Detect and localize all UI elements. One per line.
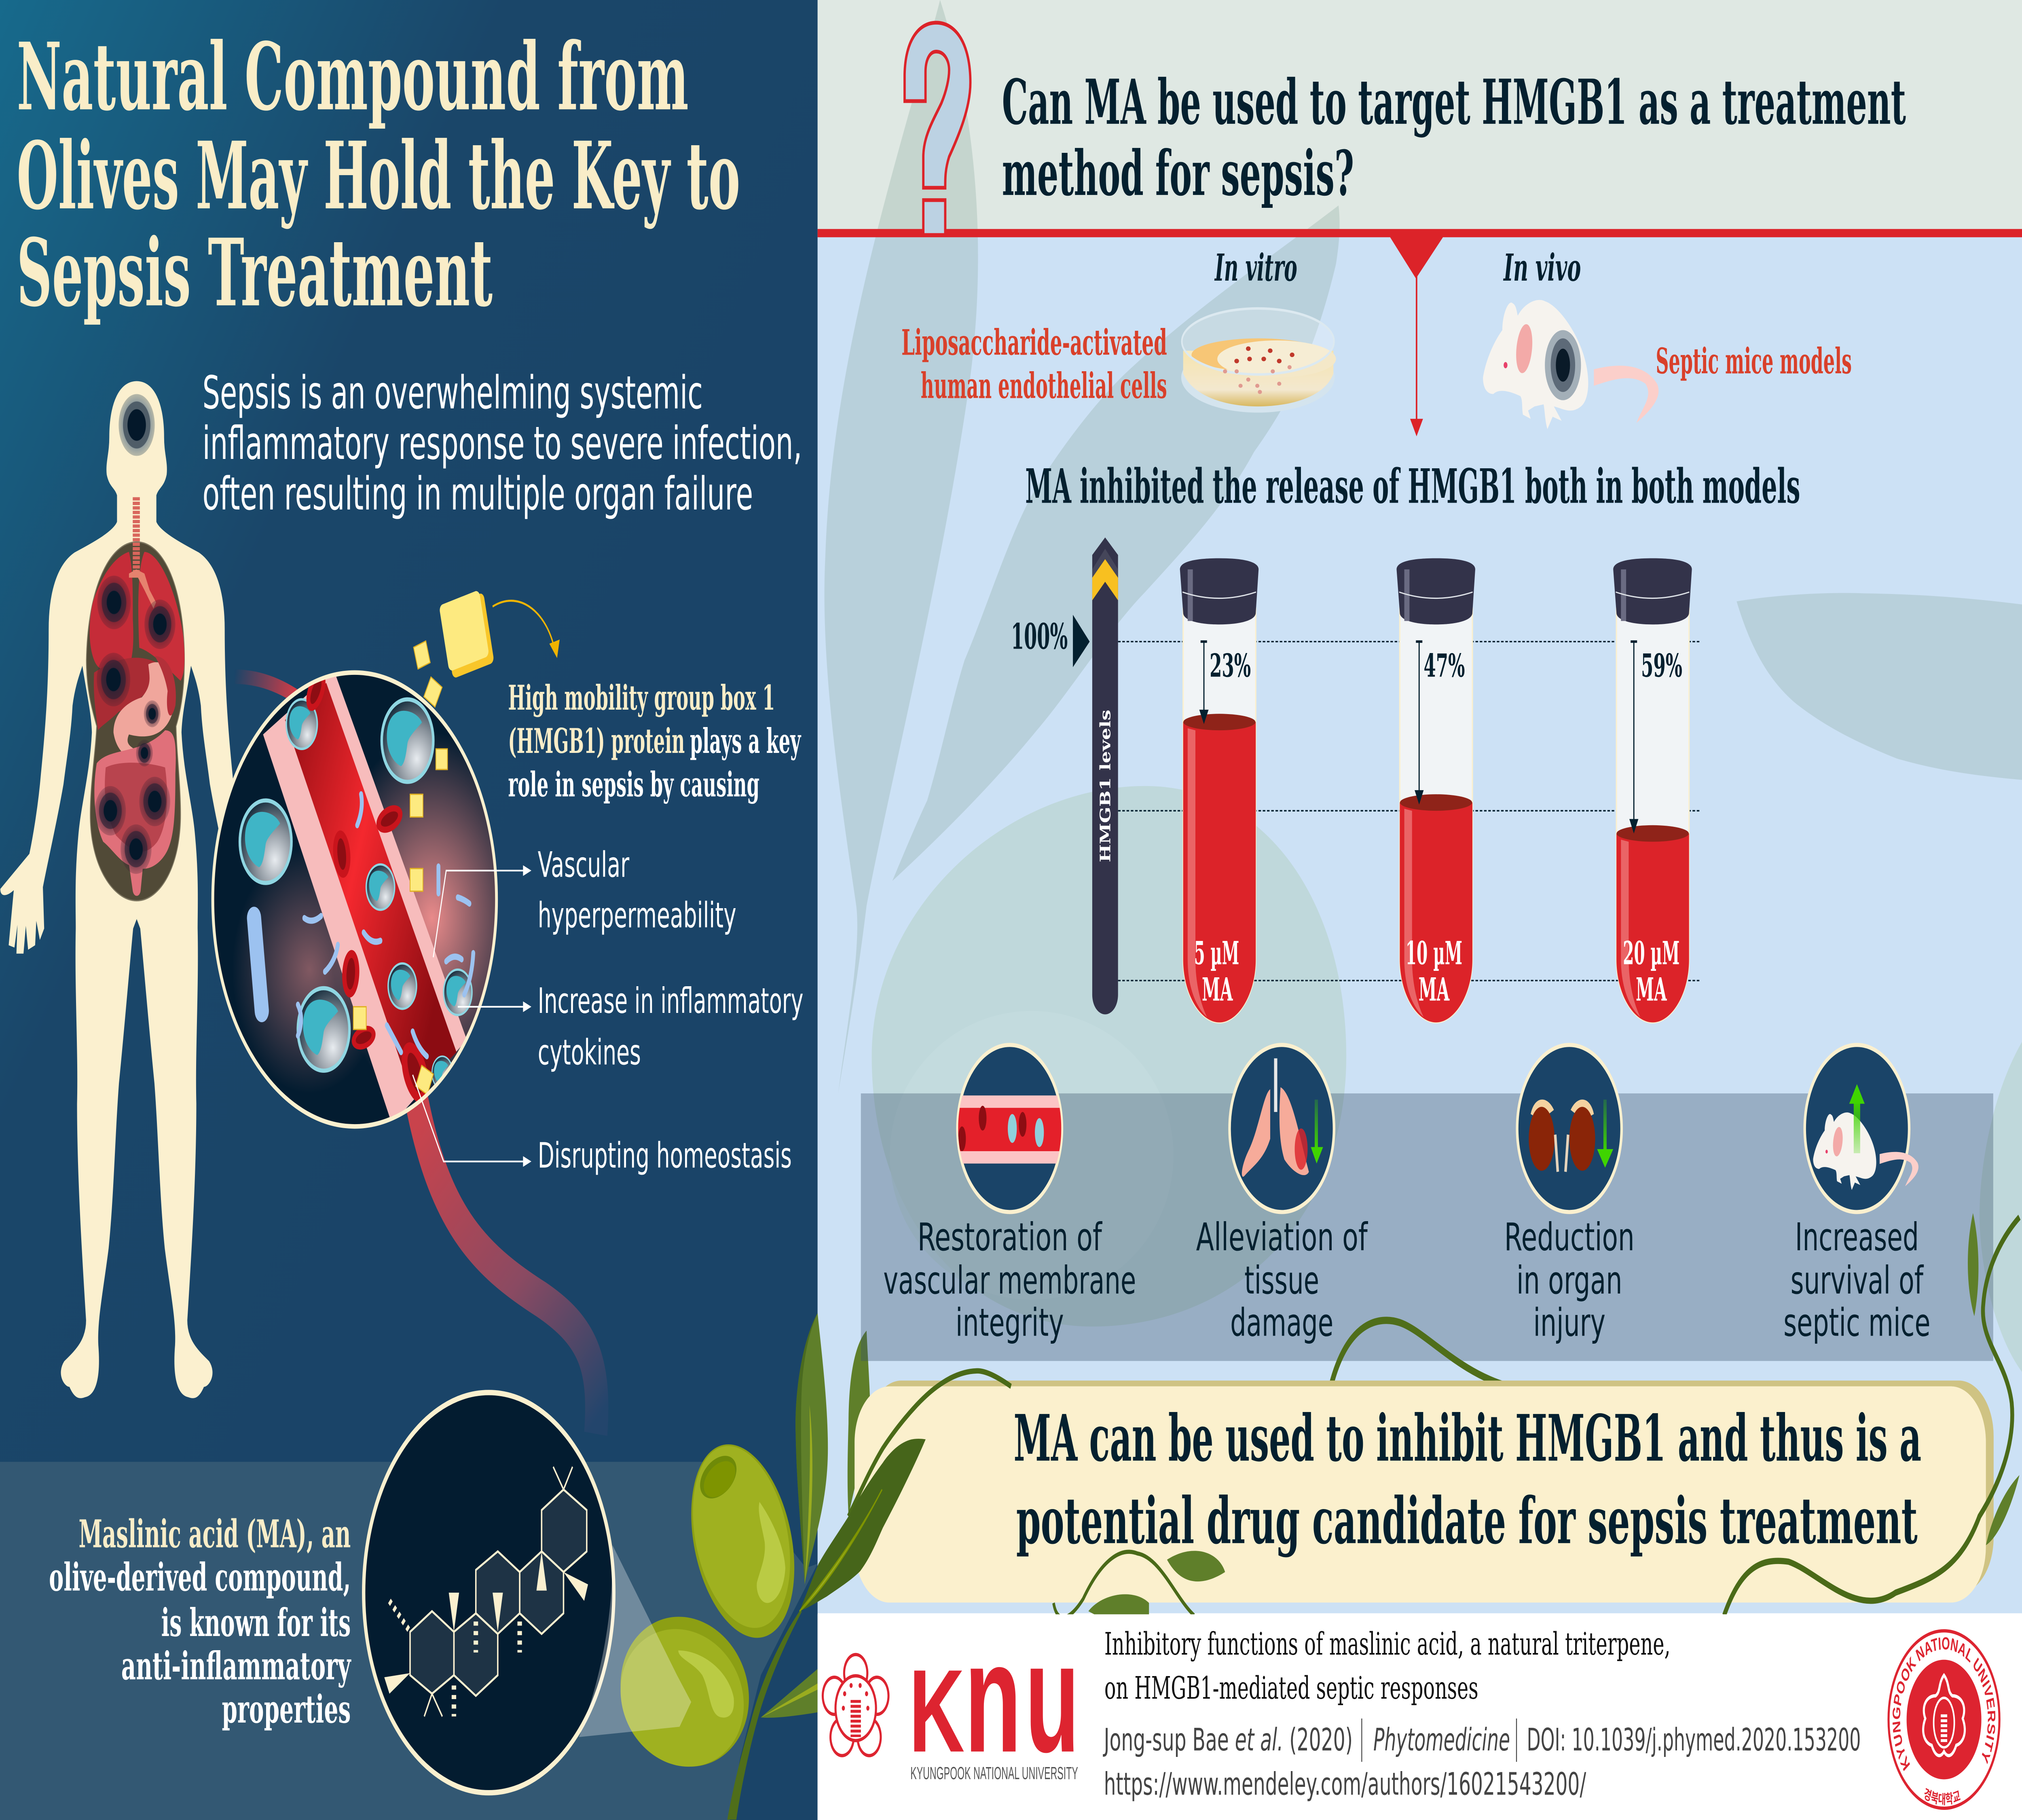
- outcome: organ injury: in organ: [1516, 1258, 1622, 1303]
- outcome: organ injury: Reduction: [1504, 1215, 1635, 1260]
- icon: blue cytokine bacteria: [254, 794, 473, 1056]
- in vitro label: In vitro: [1214, 246, 1297, 290]
- icon: kidneys: [1517, 1045, 1622, 1212]
- outcome: tissue damage: damage: [1230, 1300, 1333, 1345]
- outcome: organ injury: [1504, 1215, 1635, 1345]
- outcome: survival: survival of: [1791, 1258, 1924, 1303]
- conclusion banner: [854, 1380, 1994, 1602]
- effects list: cytokines: [538, 1032, 641, 1073]
- HMGB1 description text: High mobility group box 1: [508, 678, 775, 718]
- icon: olive bottom: [614, 1604, 755, 1780]
- test tube: 5 uM: 23%: [1210, 647, 1251, 685]
- maslinic acid text: Maslinic acid (MA), an: [79, 1511, 351, 1556]
- effects list: Vascular: [538, 845, 629, 886]
- citation text: https://www.mendeley.com/authors/16021543200/: [1104, 1767, 1586, 1803]
- human body with organs: [1, 382, 273, 1398]
- maslinic acid text: anti-inflammatory: [121, 1643, 351, 1689]
- icon: immune cells: [240, 700, 472, 1089]
- intro text: inflammatory response to severe infection,: [203, 417, 802, 470]
- test tube: 5 uM: [1180, 558, 1258, 1023]
- red divider line: [818, 229, 2022, 237]
- blood vessel tail: [235, 676, 597, 1434]
- outcome: survival: Increased: [1795, 1215, 1919, 1260]
- test tube: 20 uM: 59%: [1641, 647, 1682, 685]
- citation text: Inhibitory functions of maslinic acid, a natural triterpene,: [1104, 1626, 1671, 1662]
- test tube: 20 uM: 20 µM: [1623, 934, 1679, 972]
- 100 percent marker: 100%: [1011, 616, 1068, 657]
- panel: left background: [0, 0, 818, 1820]
- effects list: [538, 845, 804, 1176]
- 100 percent marker: [1011, 615, 1090, 667]
- callout lines: [412, 867, 530, 1166]
- citation text: on HMGB1-mediated septic responses: [1104, 1670, 1478, 1706]
- outcome: organ injury: injury: [1533, 1300, 1605, 1345]
- magnified blood vessel circle: [211, 670, 498, 1129]
- effects list: Increase in inflammatory: [538, 981, 804, 1022]
- in vitro cells label: human endothelial cells: [921, 366, 1167, 407]
- title: Sepsis Treatment: [17, 218, 493, 328]
- icon: septic mouse: [1483, 300, 1658, 429]
- citation text: Phytomedicine: [1373, 1723, 1510, 1758]
- heading: question: [1002, 66, 1906, 210]
- panel: right background: [818, 0, 2022, 1613]
- logo: KNU: [909, 1609, 1079, 1785]
- arrow: central red arrow: [1389, 235, 1444, 436]
- dotted guide lines: [1118, 642, 1700, 981]
- outcome: vascular membrane: integrity: [956, 1300, 1064, 1345]
- HMGB1 description text: [508, 678, 802, 805]
- outcome: tissue damage: [1196, 1215, 1368, 1345]
- icon: KNU seal: KYUNGPOOK NATIONAL UNIVERSITY: [1890, 1633, 1998, 1774]
- logo: KNU: KYUNGPOOK NATIONAL UNIVERSITY: [910, 1763, 1078, 1783]
- chart axis: HMGB1 levels: HMGB1 levels: [1097, 710, 1114, 862]
- icon: lungs: [1229, 1045, 1334, 1212]
- title: Natural Compound from: [17, 23, 689, 132]
- intro text: [203, 367, 802, 521]
- citation text: Jong-sup Bae et al. (2020): [1103, 1723, 1353, 1758]
- maslinic acid text: [49, 1511, 351, 1732]
- HMGB1 description text: role in sepsis by causing: [508, 764, 759, 805]
- test tube: 5 uM: MA: [1202, 970, 1233, 1008]
- icon: vessel restoration: [958, 1045, 1062, 1212]
- outcome: vascular membrane: vascular membrane: [883, 1258, 1136, 1303]
- septic mice label: Septic mice models: [1656, 341, 1852, 382]
- in vitro cells label: [901, 322, 1167, 407]
- citation text: [1103, 1626, 1861, 1803]
- maslinic acid text: properties: [222, 1687, 351, 1732]
- in vitro cells label: Liposaccharide-activated: [901, 322, 1167, 364]
- icon: petri dish: [1181, 309, 1336, 412]
- outcome: tissue damage: Alleviation of: [1196, 1215, 1368, 1260]
- chemical structure circle: [364, 1393, 691, 1793]
- icon: question mark: [905, 23, 971, 233]
- test tube: 10 uM: MA: [1419, 970, 1450, 1008]
- chart axis: HMGB1 levels: [1092, 537, 1118, 1015]
- olive vines over banner: [799, 1213, 2020, 1617]
- conclusion banner: potential drug candidate for sepsis treatment: [1016, 1484, 1918, 1559]
- icon: KNU emblem: [823, 1655, 888, 1756]
- vine behind conclusion banner: [1331, 1320, 1509, 1387]
- logo: KNU: n: [964, 1609, 1022, 1785]
- effects list: hyperpermeability: [538, 895, 736, 936]
- title: Olives May Hold the Key to: [17, 122, 740, 230]
- test tube: 20 uM: [1613, 558, 1692, 1023]
- icon: HMGB1 yellow box with floating squares: [414, 588, 494, 707]
- citation text: DOI: 10.1039/j.phymed.2020.153200: [1527, 1723, 1861, 1758]
- test tube: 10 uM: [1396, 558, 1475, 1023]
- arrow: curved yellow arrow: [493, 601, 560, 658]
- title: [17, 23, 740, 328]
- outcome: tissue damage: tissue: [1244, 1258, 1319, 1303]
- outcome: vascular membrane: [883, 1215, 1136, 1345]
- test tube: 5 uM: 5 µM: [1194, 934, 1239, 972]
- logo: KNU: u: [1025, 1609, 1079, 1785]
- maslinic acid text: is known for its: [161, 1600, 351, 1645]
- test tube: 20 uM: MA: [1636, 970, 1667, 1008]
- icon: olive top: [670, 1414, 815, 1668]
- logo: KNU: K: [909, 1645, 964, 1777]
- panel: outcomes band: [861, 1093, 1993, 1361]
- panel: footer: [818, 1614, 2022, 1820]
- HMGB1 description text: plays a key: [690, 721, 802, 761]
- test tube: 10 uM: 47%: [1423, 647, 1465, 685]
- icon: KNU seal: 경북대학교: [1923, 1786, 1961, 1807]
- maslinic acid text: olive-derived compound,: [49, 1555, 351, 1600]
- olive branch left: [614, 1313, 870, 1820]
- in vivo label: In vivo: [1503, 246, 1581, 290]
- icon: red blood cells: [302, 666, 434, 1110]
- heading: result: MA inhibited the release of HMGB1 both in both models: [1025, 459, 1800, 514]
- outcome: survival: septic mice: [1783, 1300, 1931, 1345]
- test tube: 10 uM: 10 µM: [1406, 934, 1462, 972]
- HMGB1 description text: (HMGB1) protein: [508, 721, 685, 761]
- intro text: Sepsis is an overwhelming systemic: [203, 367, 703, 420]
- icon: surviving mouse: [1805, 1045, 1918, 1212]
- effects list: Disrupting homeostasis: [538, 1136, 792, 1176]
- heading: question: method for sepsis?: [1002, 137, 1354, 210]
- outcome: vascular membrane: Restoration of: [918, 1215, 1103, 1260]
- outcome: survival: [1783, 1215, 1931, 1345]
- intro text: often resulting in multiple organ failure: [203, 468, 753, 521]
- icon: small HMGB1 squares: [353, 749, 448, 1095]
